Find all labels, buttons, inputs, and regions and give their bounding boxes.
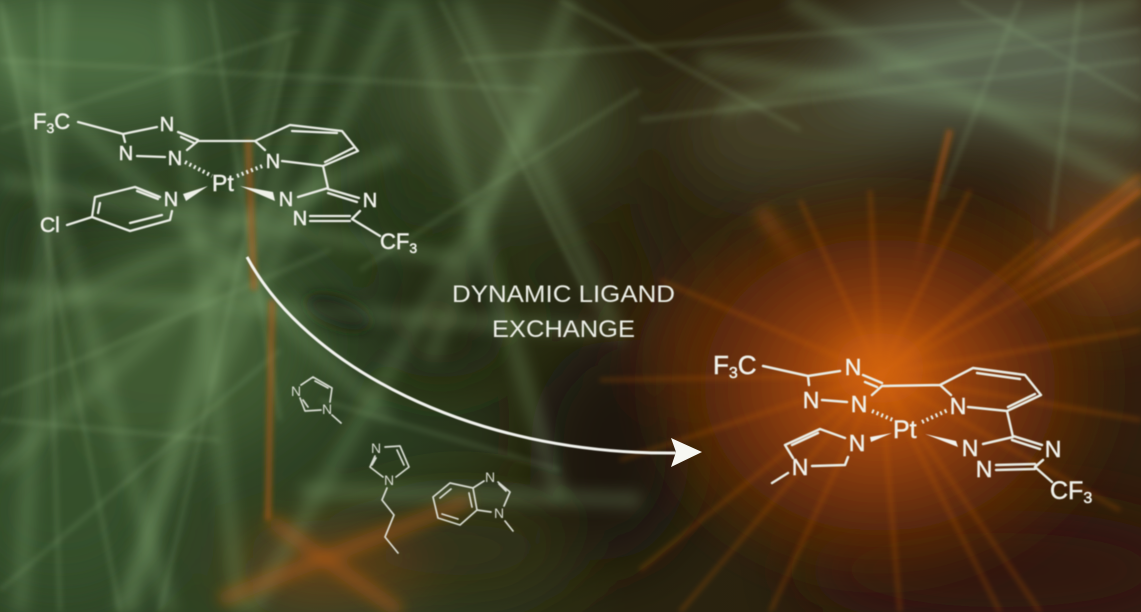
- label: F3C: C: [54, 109, 70, 134]
- orange fibres: [248, 130, 1141, 520]
- nitrogen labels: [792, 354, 1061, 482]
- nitrogen labels: N: [168, 148, 182, 170]
- label: Cl: Cl: [40, 214, 60, 237]
- nitrogen labels: [119, 114, 377, 230]
- nitrogen labels: N: [849, 430, 865, 456]
- label: F3C: F: [713, 350, 729, 380]
- label: CF3: 3: [1083, 490, 1092, 507]
- nitrogen labels: N: [266, 151, 280, 173]
- caption: [452, 281, 675, 343]
- molecule: starting platinum complex: [33, 109, 417, 256]
- incoming ligands: [291, 377, 513, 553]
- ligand: butylimidazole: N: [384, 472, 394, 488]
- nitrogen labels: N: [845, 354, 861, 380]
- caption: EXCHANGE: [492, 316, 635, 343]
- label: F3C: C: [738, 350, 757, 380]
- curved reaction arrow: [247, 257, 702, 467]
- nitrogen labels: N: [160, 114, 174, 136]
- ligand: methylbenzimidazole: [433, 469, 513, 531]
- nitrogen labels: N: [293, 208, 307, 230]
- ligand: methylimidazole: [291, 377, 341, 423]
- coordination wedges: [183, 186, 275, 201]
- dark spot: [301, 287, 375, 337]
- ligand: butylimidazole: [370, 440, 409, 553]
- orange glow burst: [600, 175, 1141, 612]
- nitrogen labels: N: [164, 189, 178, 211]
- nitrogen labels: N: [363, 190, 377, 212]
- label: F3C: 3: [729, 365, 738, 382]
- label: F3C: F: [33, 109, 46, 134]
- coordination dashes: [872, 410, 948, 422]
- ligand: methylbenzimidazole: N: [485, 469, 495, 485]
- ligand: methylbenzimidazole: N: [494, 505, 504, 521]
- nitrogen labels: N: [803, 387, 819, 413]
- bonds: [67, 122, 380, 236]
- caption: DYNAMIC LIGAND: [452, 281, 675, 308]
- label: Pt centre: Pt: [212, 170, 234, 196]
- coordination dashes: [185, 162, 265, 176]
- label: CF3: CF: [1050, 477, 1083, 505]
- nitrogen labels: N: [119, 143, 133, 165]
- nitrogen labels: N: [851, 391, 867, 417]
- nitrogen labels: N: [962, 435, 978, 461]
- ligand: butylimidazole: N: [371, 440, 381, 456]
- ligand: methylimidazole: N: [322, 401, 332, 417]
- molecule: product platinum complex: [713, 350, 1092, 507]
- coordination wedges: [870, 433, 958, 447]
- nitrogen labels: N: [1045, 436, 1061, 462]
- nitrogen labels: N: [976, 456, 992, 482]
- label: F3C: 3: [46, 120, 54, 136]
- ligand: methylimidazole: N: [291, 383, 301, 399]
- label: CF3: 3: [409, 240, 417, 256]
- nitrogen labels: N: [792, 454, 808, 480]
- nitrogen labels: N: [279, 189, 293, 211]
- label: CF3: CF: [380, 229, 409, 254]
- label: Pt centre: Pt: [893, 416, 917, 444]
- nitrogen labels: N: [950, 393, 966, 419]
- bonds: [763, 366, 1052, 483]
